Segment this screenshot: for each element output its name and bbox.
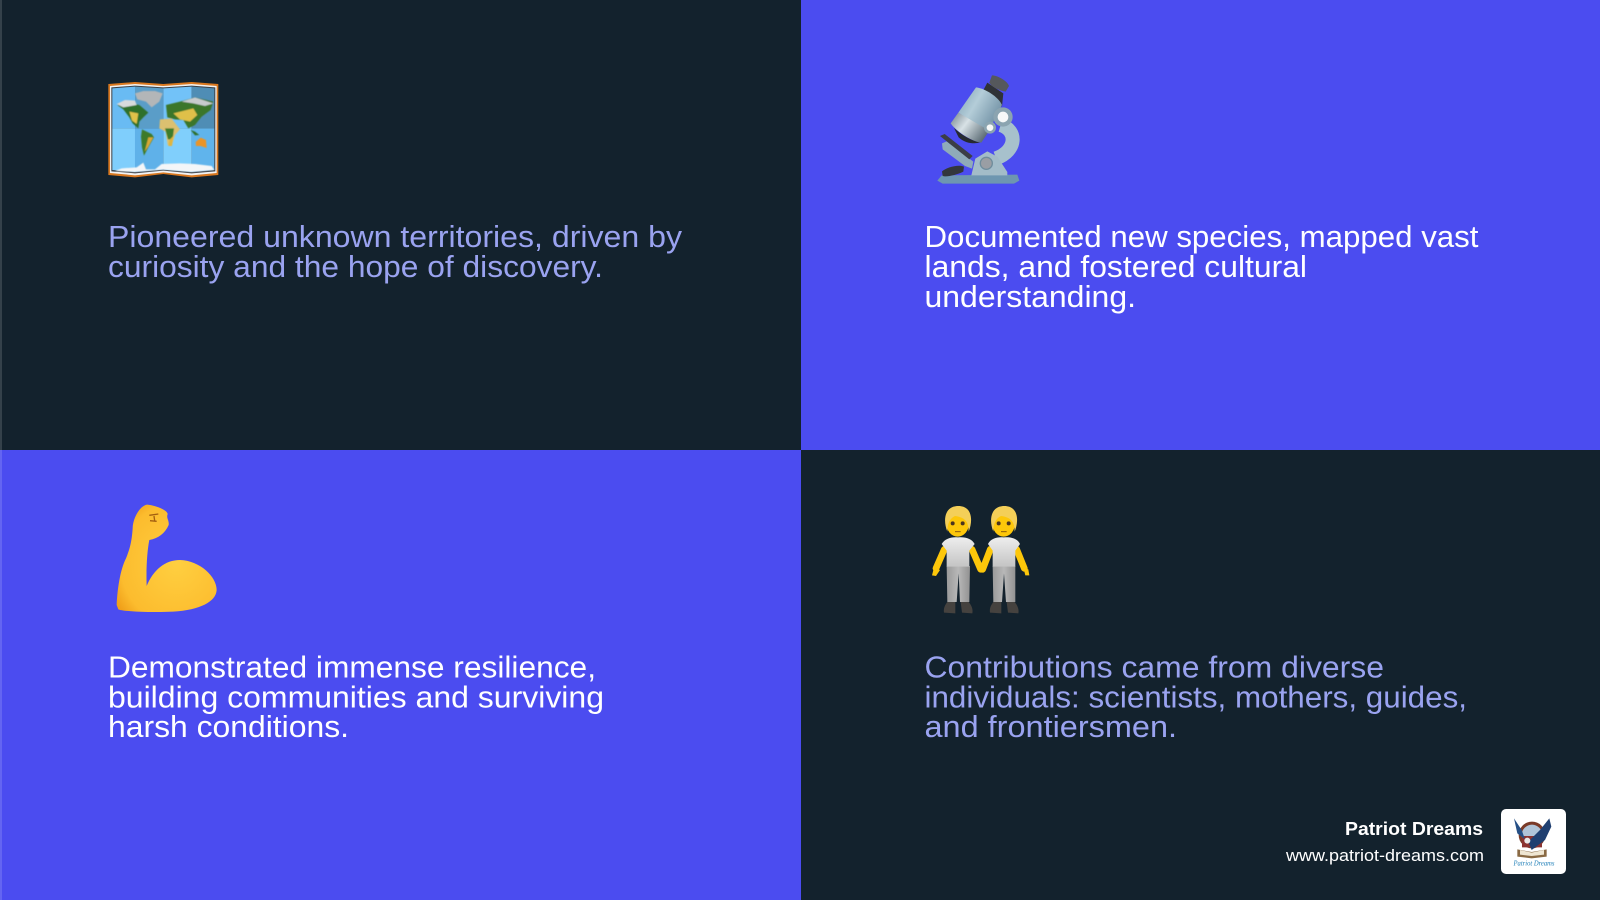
panel: scientists	[801, 0, 1600, 450]
panel: resilience	[0, 450, 801, 900]
text: contributors: individuals: scientists, mothers, guides,	[924, 680, 1467, 714]
text: contributors: Contributions came from diverse	[924, 650, 1384, 684]
person left	[932, 506, 981, 613]
text: resilience	[108, 650, 604, 744]
logo	[1501, 809, 1566, 874]
text: contributors	[924, 650, 1467, 744]
text: scientists: Documented new species, mapped vast	[924, 219, 1479, 254]
text: scientists: understanding.	[924, 279, 1136, 314]
icon: flexed biceps	[117, 505, 217, 612]
text: resilience: Demonstrated immense resilience,	[108, 650, 596, 684]
icon: two people holding hands	[932, 506, 1029, 613]
person right	[983, 506, 1029, 613]
panel: pioneers	[0, 0, 801, 450]
text: pioneers: curiosity and the hope of discovery.	[108, 249, 603, 284]
text: scientists	[924, 219, 1479, 314]
brand website: www.patriot-dreams.com	[1285, 847, 1484, 865]
brand name: Patriot Dreams	[1345, 818, 1483, 839]
text: scientists: lands, and fostered cultural	[924, 249, 1307, 284]
text: resilience: harsh conditions.	[108, 709, 349, 744]
text: contributors: and frontiersmen.	[924, 709, 1177, 744]
icon: world map	[108, 82, 218, 177]
icon: microscope	[937, 75, 1019, 184]
logo: Patriot Dreams	[1513, 860, 1555, 868]
text: pioneers	[108, 219, 683, 284]
panel: contributors	[801, 450, 1600, 900]
text: pioneers: Pioneered unknown territories, driven by	[108, 219, 683, 254]
text: resilience: building communities and surviving	[108, 680, 604, 714]
